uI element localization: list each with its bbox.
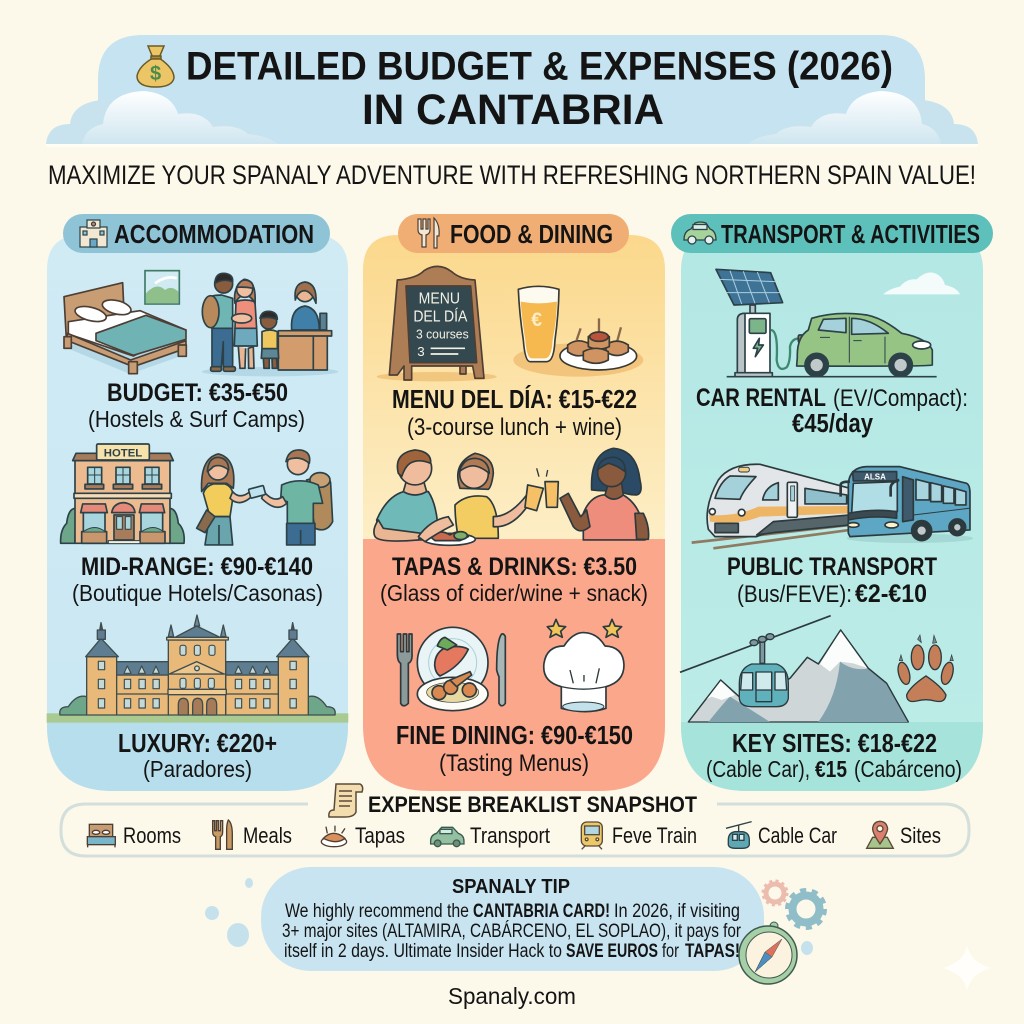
- illustration: solar EV charger and car: [716, 269, 937, 377]
- illustration: ALSA bus: ALSA: [864, 472, 886, 481]
- text: tapas and drinks: (Glass of cider/wine + snack): [380, 580, 648, 606]
- text: key sites: [706, 730, 962, 782]
- icon: money bag: [137, 46, 174, 87]
- text: public transport: PUBLIC TRANSPORT: [727, 553, 937, 581]
- heading pill: food and dining: [398, 214, 629, 253]
- title: [186, 44, 893, 134]
- text: luxury: LUXURY: €220+: [118, 730, 277, 758]
- heading pill: food and dining: FOOD & DINING: [450, 219, 613, 249]
- heading pill: accommodation: [63, 214, 330, 253]
- illustration: menu chalkboard: 3 courses: [416, 327, 469, 342]
- text: key sites: KEY SITES: €18-€22: [732, 730, 937, 758]
- item: rooms: [87, 823, 181, 848]
- panel: expense snapshot: [61, 784, 969, 856]
- panel: accommodation: [47, 214, 348, 791]
- header banner: [46, 35, 978, 147]
- tip body text: SAVE EUROS: [566, 941, 658, 962]
- tip body text: CANTABRIA CARD!: [473, 901, 610, 922]
- text: public transport: €2-€10: [855, 580, 927, 608]
- illustration: hotel building: [61, 444, 184, 544]
- illustration: menu chalkboard: [377, 266, 497, 381]
- illustration: beer and pintxos: [513, 286, 643, 377]
- text: car rental: [696, 384, 968, 438]
- item: cable car: Cable Car: [758, 823, 837, 848]
- icon: fork and knife: [418, 218, 439, 248]
- text: tapas and drinks: TAPAS & DRINKS: €3.50: [392, 553, 637, 581]
- icon: compass: [739, 922, 797, 984]
- heading pill: accommodation: ACCOMMODATION: [114, 219, 314, 249]
- panel: transport and activities: [671, 214, 993, 791]
- illustration: couple exchanging card: [197, 450, 333, 545]
- text: car rental: €45/day: [792, 410, 874, 438]
- text: key sites: €15: [815, 756, 847, 782]
- text: tapas and drinks: [380, 553, 648, 606]
- tip body text: itself in 2 days. Ultimate Insider Hack to: [284, 941, 562, 962]
- text: car rental: CAR RENTAL: [696, 384, 826, 412]
- icon: scroll: [329, 784, 363, 817]
- text: key sites: (Cabárceno): [854, 756, 962, 782]
- text: fine dining: [396, 722, 633, 777]
- illustration: menu chalkboard: MENU: [419, 290, 460, 307]
- illustration: chef hat and stars: [544, 619, 624, 712]
- text: mid-range: (Boutique Hotels/Casonas): [72, 580, 323, 606]
- icon: teal gear: [788, 890, 824, 928]
- illustration: feve train: [692, 464, 850, 548]
- item: sites: Sites: [900, 823, 941, 848]
- illustration: friends toasting: [374, 448, 649, 545]
- cloud: left: [46, 91, 278, 144]
- cloud: right: [748, 91, 978, 144]
- tip body text: TAPAS!: [685, 941, 740, 962]
- item: sites: [867, 821, 941, 848]
- icon: green car: [684, 222, 716, 244]
- title: DETAILED BUDGET & EXPENSES (2026): [186, 44, 893, 88]
- item: cable car: [726, 822, 837, 848]
- illustration: menu chalkboard: DEL DÍA: [413, 307, 468, 326]
- text: public transport: (Bus/FEVE):: [737, 581, 852, 608]
- tip body text: [282, 901, 742, 962]
- item: meals: Meals: [243, 823, 292, 848]
- tip body text: 3+ major sites (ALTAMIRA, CABÁRCENO, EL SOPLAO), it pays for: [282, 921, 742, 942]
- illustration: parador palace: [47, 615, 348, 723]
- sparkle: [943, 945, 991, 991]
- item: feve train: [581, 822, 697, 849]
- decorative dots: [205, 878, 813, 955]
- illustration: family at reception: [202, 273, 338, 376]
- panel: food and dining: [363, 214, 665, 791]
- text: menu del dia: [392, 385, 637, 441]
- text: mid-range: MID-RANGE: €90-€140: [81, 553, 313, 581]
- item: tapas: Tapas: [355, 823, 405, 848]
- text: mid-range: [72, 553, 323, 606]
- item: transport: Transport: [470, 823, 551, 848]
- text: menu del dia: (3-course lunch + wine): [407, 414, 622, 441]
- illustration: landscape picture: [145, 271, 179, 304]
- illustration: fine dining plate: [397, 627, 505, 711]
- text: key sites: (Cable Car),: [706, 756, 810, 782]
- item: transport: [431, 823, 551, 848]
- text: luxury: [118, 730, 277, 782]
- tip heading: SPANALY TIP: [452, 876, 570, 898]
- illustration: beer and pintxos: €: [531, 310, 542, 331]
- illustration: bed: [63, 283, 187, 374]
- heading: expense breaklist snapshot: EXPENSE BREAKLIST SNAPSHOT: [368, 792, 697, 817]
- illustration: mountains and cable car: [680, 616, 908, 722]
- heading pill: transport and activities: [671, 214, 993, 253]
- item: feve train: Feve Train: [612, 823, 697, 848]
- illustration: hotel building: HOTEL: [104, 448, 142, 460]
- tip panel: [261, 867, 764, 971]
- text: car rental: (EV/Compact):: [833, 385, 968, 412]
- text: fine dining: (Tasting Menus): [439, 750, 589, 777]
- icon: hotel: [80, 220, 107, 247]
- tip body text: We highly recommend the: [285, 901, 469, 922]
- text: budget: [88, 379, 305, 432]
- illustration: menu chalkboard: 3: [417, 344, 425, 359]
- text: public transport: [727, 553, 937, 608]
- text: menu del dia: MENU DEL DÍA: €15-€22: [392, 385, 637, 414]
- icon: small pink gear: [763, 881, 787, 905]
- text: budget: BUDGET: €35-€50: [107, 379, 288, 407]
- item: rooms: Rooms: [123, 823, 181, 848]
- text: fine dining: FINE DINING: €90-€150: [396, 722, 633, 750]
- text: luxury: (Paradores): [143, 756, 252, 782]
- icon: wolf paw print: [896, 635, 955, 701]
- text: budget: (Hostels & Surf Camps): [88, 406, 305, 432]
- title: IN CANTABRIA: [362, 86, 664, 134]
- icon: money bag: $: [150, 63, 161, 85]
- footer: site name: Spanaly.com: [448, 983, 576, 1009]
- illustration: cloud: [883, 272, 960, 294]
- illustration: ALSA bus: [841, 467, 973, 543]
- item: meals: [213, 820, 292, 849]
- item: tapas: [321, 823, 405, 848]
- tip body text: In 2026, if visiting: [614, 901, 740, 922]
- tip body text: for: [662, 941, 680, 962]
